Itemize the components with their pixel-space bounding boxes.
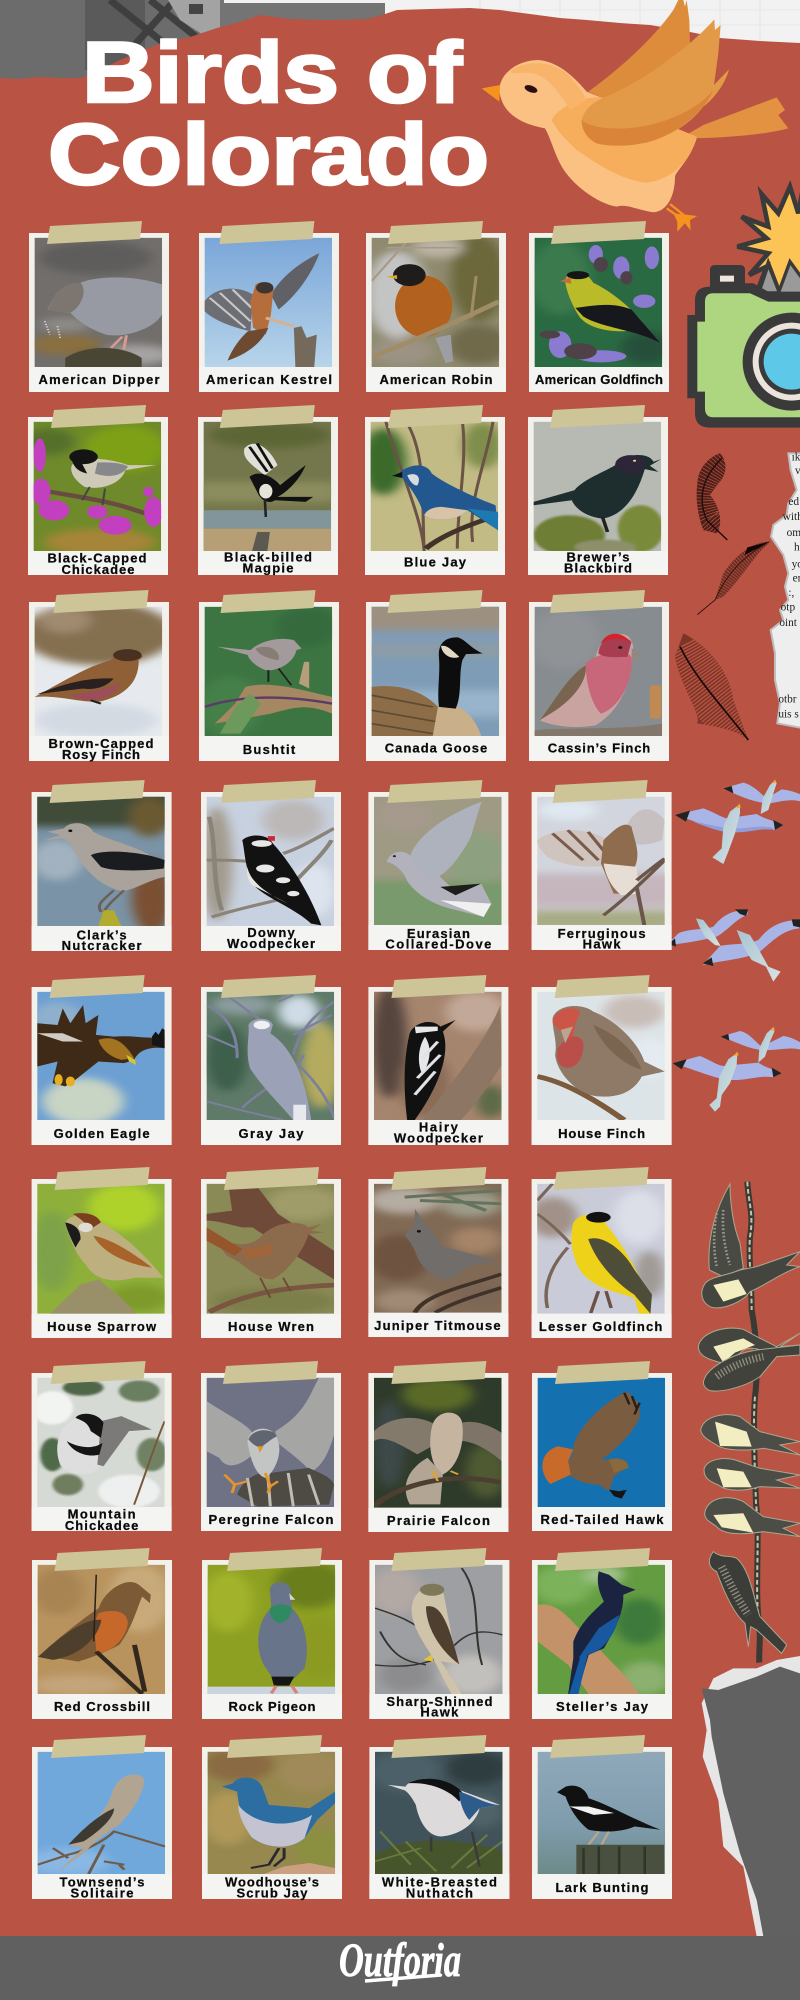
- illustration: orange bird: [482, 0, 788, 232]
- caption: Downy: [247, 925, 296, 940]
- card: House Sparrow: [32, 1167, 172, 1338]
- photo: Clark's Nutcracker: [37, 796, 165, 926]
- tape: [51, 405, 146, 428]
- tape: [550, 405, 645, 428]
- caption: House Finch: [558, 1126, 645, 1141]
- card: Canada Goose: [361, 590, 509, 761]
- caption: Black-Capped: [48, 551, 147, 566]
- caption: [201, 1314, 341, 1338]
- photo: Black-billed Magpie: [204, 422, 332, 551]
- caption: [32, 1314, 172, 1338]
- photo: American Goldfinch: [534, 238, 662, 367]
- caption: American Kestrel: [206, 372, 332, 387]
- tape: [391, 1548, 486, 1571]
- photo: Cassin's Finch: [534, 606, 662, 736]
- caption: [201, 1507, 341, 1531]
- card: American Dipper: [29, 221, 172, 392]
- torn book page: otp: [781, 602, 795, 614]
- torn grid paper: top right: [385, 0, 800, 60]
- card: Red-Tailed Hawk: [532, 1361, 672, 1531]
- tape: [391, 975, 486, 998]
- caption: [532, 1120, 672, 1145]
- photo: White-Breasted Nuthatch: [375, 1752, 502, 1874]
- caption: Brewer’s: [566, 550, 630, 565]
- tape: [555, 975, 650, 998]
- tape: [54, 590, 148, 613]
- tape: [550, 590, 645, 613]
- tape: [220, 405, 315, 428]
- card: House Finch: [532, 975, 672, 1145]
- caption: Solitaire: [70, 1886, 134, 1901]
- caption: [368, 1120, 508, 1145]
- caption: Lark Bunting: [556, 1880, 649, 1895]
- caption: Rock Pigeon: [228, 1699, 316, 1714]
- caption: [532, 1694, 672, 1719]
- caption: Clark’s: [77, 927, 127, 942]
- title: Birds of: [82, 25, 462, 121]
- caption: Nutcracker: [62, 938, 142, 953]
- caption: [532, 925, 672, 952]
- photo: Black-Capped Chickadee: [34, 422, 162, 551]
- photo: Peregrine Falcon: [206, 1378, 334, 1507]
- tape: [388, 221, 483, 244]
- caption: Blue Jay: [404, 555, 467, 570]
- photo: Prairie Falcon: [374, 1378, 502, 1508]
- card: Clark's Nutcracker: [27, 780, 175, 953]
- caption: [29, 736, 169, 762]
- card: Ferruginous Hawk: [527, 780, 675, 952]
- caption: Woodhouse’s: [225, 1875, 319, 1890]
- caption: American Goldfinch: [535, 372, 663, 387]
- photo: Golden Eagle: [37, 992, 165, 1120]
- caption: [201, 925, 341, 951]
- caption: [199, 367, 339, 392]
- caption: Brown-Capped: [48, 736, 154, 751]
- caption: [529, 736, 669, 761]
- card: Bushtit: [199, 590, 339, 761]
- photo: Downy Woodpecker: [206, 796, 334, 926]
- photo: Canada Goose: [372, 606, 500, 736]
- title: Colorado: [48, 107, 489, 203]
- torn book page: :,: [788, 587, 794, 599]
- tape: [553, 780, 648, 803]
- caption: [199, 736, 339, 761]
- card: Lark Bunting: [532, 1735, 672, 1899]
- caption: Prairie Falcon: [387, 1513, 490, 1528]
- card: Hairy Woodpecker: [368, 975, 508, 1145]
- card: Brewer's Blackbird: [528, 405, 668, 576]
- torn grey paper: bottom right: [702, 1656, 800, 1936]
- photo: Hairy Woodpecker: [374, 992, 502, 1120]
- caption: [202, 1874, 342, 1901]
- caption: [528, 550, 668, 576]
- caption: Scrub Jay: [236, 1886, 308, 1901]
- photo: Eurasian Collared-Dove: [374, 796, 502, 925]
- caption: Sharp-Shinned: [386, 1694, 492, 1709]
- card: Brown-Capped Rosy Finch: [22, 590, 175, 762]
- caption: Mountain: [68, 1507, 136, 1522]
- card: Black-Capped Chickadee: [23, 405, 168, 577]
- caption: Magpie: [242, 561, 294, 576]
- torn book page: ed: [788, 496, 799, 508]
- tape: [54, 1548, 150, 1571]
- caption: Hawk: [583, 937, 621, 952]
- tape: [388, 405, 483, 428]
- caption: Woodpecker: [227, 936, 315, 951]
- caption: [29, 367, 169, 392]
- caption: Red Crossbill: [54, 1699, 150, 1714]
- caption: [201, 1120, 341, 1145]
- caption: [368, 1508, 508, 1532]
- caption: Red-Tailed Hawk: [540, 1512, 664, 1527]
- caption: Blackbird: [564, 561, 632, 576]
- photo: Gray Jay: [206, 992, 334, 1120]
- caption: [369, 1694, 509, 1720]
- caption: Chickadee: [65, 1518, 138, 1533]
- caption: [32, 926, 172, 953]
- photo: Bushtit: [204, 606, 332, 736]
- caption: [32, 1507, 172, 1533]
- card: Lesser Goldfinch: [527, 1167, 672, 1338]
- card: American Goldfinch: [529, 221, 672, 392]
- caption: Gray Jay: [238, 1126, 304, 1141]
- caption: [198, 550, 338, 576]
- tape: [55, 1167, 150, 1190]
- caption: [32, 1694, 172, 1719]
- illustration: seagulls: [668, 779, 800, 1112]
- caption: [28, 551, 168, 577]
- caption: Eurasian: [407, 926, 470, 941]
- card: American Robin: [366, 221, 509, 392]
- tape: [221, 780, 316, 803]
- illustration: swallows on twig: [698, 1182, 800, 1663]
- card: Townsend's Solitaire: [27, 1735, 172, 1901]
- torn red edge: [0, 8, 800, 120]
- card: Sharp-Shinned Hawk: [369, 1548, 509, 1720]
- caption: American Robin: [380, 372, 493, 387]
- photo: Juniper Titmouse: [374, 1184, 502, 1313]
- card: Black-billed Magpie: [198, 405, 338, 576]
- caption: Black-billed: [224, 550, 312, 565]
- tape: [555, 1361, 650, 1384]
- caption: White-Breasted: [382, 1875, 497, 1890]
- photo: Steller's Jay: [538, 1564, 666, 1694]
- photo: Brown-Capped Rosy Finch: [34, 606, 162, 736]
- card: Downy Woodpecker: [201, 780, 341, 951]
- card: Rock Pigeon: [202, 1548, 345, 1719]
- card: Red Crossbill: [32, 1548, 172, 1719]
- photo: American Kestrel: [204, 238, 332, 367]
- caption: Juniper Titmouse: [374, 1318, 501, 1333]
- photo: House Sparrow: [37, 1184, 165, 1314]
- caption: American Dipper: [38, 372, 160, 387]
- photo: Brewer's Blackbird: [534, 422, 662, 551]
- tape: [47, 221, 142, 244]
- card: Blue Jay: [360, 405, 505, 575]
- caption: [365, 551, 505, 575]
- caption: Townsend’s: [60, 1875, 144, 1890]
- caption: Rosy Finch: [62, 747, 140, 762]
- card: Gray Jay: [201, 975, 342, 1145]
- torn book page: oint: [779, 617, 798, 629]
- photo: Lesser Goldfinch: [537, 1184, 665, 1314]
- caption: Bushtit: [243, 742, 296, 757]
- caption: [366, 736, 506, 761]
- caption: Ferruginous: [558, 926, 646, 941]
- tape: [50, 780, 145, 803]
- caption: Collared-Dove: [385, 937, 491, 952]
- torn photo strip: top left: [0, 0, 400, 90]
- photo: House Wren: [206, 1184, 334, 1314]
- title: [48, 25, 489, 203]
- tape: [550, 1735, 645, 1758]
- caption: Golden Eagle: [54, 1126, 150, 1141]
- card: Steller's Jay: [532, 1548, 672, 1719]
- tape: [551, 221, 646, 244]
- photo: Rock Pigeon: [208, 1564, 336, 1694]
- illustration: feathers: [675, 453, 771, 740]
- caption: [366, 367, 506, 392]
- photo: American Dipper: [34, 238, 162, 367]
- tape: [388, 590, 482, 613]
- tape: [220, 590, 316, 613]
- caption: Cassin’s Finch: [548, 741, 650, 756]
- tape: [50, 975, 145, 998]
- photo: Red Crossbill: [38, 1564, 166, 1694]
- photo: Townsend's Solitaire: [38, 1752, 166, 1874]
- caption: House Sparrow: [47, 1319, 157, 1334]
- card: Woodhouse's Scrub Jay: [202, 1735, 345, 1901]
- tape: [51, 1361, 146, 1384]
- card: House Wren: [201, 1167, 341, 1338]
- caption: Hairy: [419, 1120, 459, 1135]
- tape: [387, 780, 482, 803]
- card: White-Breasted Nuthatch: [369, 1735, 509, 1901]
- tape: [391, 1361, 486, 1384]
- card: Eurasian Collared-Dove: [364, 780, 512, 952]
- caption: [369, 1874, 509, 1901]
- caption: [532, 1874, 672, 1899]
- photo: Sharp-Shinned Hawk: [375, 1564, 502, 1694]
- tape: [224, 1167, 319, 1190]
- photo: House Finch: [537, 992, 665, 1120]
- caption: Canada Goose: [385, 741, 487, 756]
- caption: [532, 1314, 672, 1338]
- caption: Steller’s Jay: [556, 1699, 649, 1714]
- caption: [532, 1507, 672, 1531]
- photo: Mountain Chickadee: [37, 1378, 165, 1507]
- card: Mountain Chickadee: [32, 1361, 172, 1533]
- illustration: camera and flash: [687, 187, 800, 428]
- torn book page: uis s: [778, 708, 799, 720]
- caption: Woodpecker: [394, 1130, 483, 1145]
- tape: [554, 1167, 649, 1190]
- tape: [391, 1735, 486, 1758]
- card: Golden Eagle: [32, 975, 172, 1145]
- caption: [368, 1313, 508, 1337]
- caption: Peregrine Falcon: [208, 1512, 334, 1527]
- caption: [32, 1120, 172, 1145]
- tape: [555, 1548, 650, 1571]
- tape: [219, 221, 314, 244]
- caption: [202, 1694, 342, 1719]
- caption: Chickadee: [62, 562, 134, 577]
- caption: [368, 925, 508, 952]
- footer logo: Outforia: [339, 1934, 461, 1987]
- torn book page: otbr: [778, 694, 797, 706]
- photo: Woodhouse's Scrub Jay: [208, 1752, 336, 1874]
- tape: [221, 975, 316, 998]
- caption: House Wren: [228, 1319, 314, 1334]
- photo: Lark Bunting: [538, 1752, 665, 1874]
- caption: Lesser Goldfinch: [539, 1319, 662, 1334]
- tape: [227, 1548, 322, 1571]
- card: American Kestrel: [199, 221, 339, 392]
- tape: [227, 1735, 322, 1758]
- tape: [391, 1167, 486, 1190]
- card: Juniper Titmouse: [368, 1167, 508, 1337]
- tape: [51, 1735, 146, 1758]
- card: Cassin's Finch: [529, 590, 669, 761]
- tape: [223, 1361, 318, 1384]
- photo: American Robin: [372, 238, 500, 367]
- torn book page: h: [794, 542, 800, 554]
- photo: Blue Jay: [370, 422, 498, 551]
- photo: Ferruginous Hawk: [537, 796, 665, 925]
- card: Peregrine Falcon: [201, 1361, 341, 1531]
- caption: [529, 367, 669, 392]
- caption: Hawk: [420, 1705, 459, 1720]
- photo: Red-Tailed Hawk: [538, 1378, 666, 1507]
- caption: Nuthatch: [406, 1886, 473, 1901]
- footer bar: [0, 1936, 800, 2000]
- torn book page: [771, 452, 800, 728]
- caption: [32, 1874, 172, 1901]
- card: Prairie Falcon: [368, 1361, 508, 1532]
